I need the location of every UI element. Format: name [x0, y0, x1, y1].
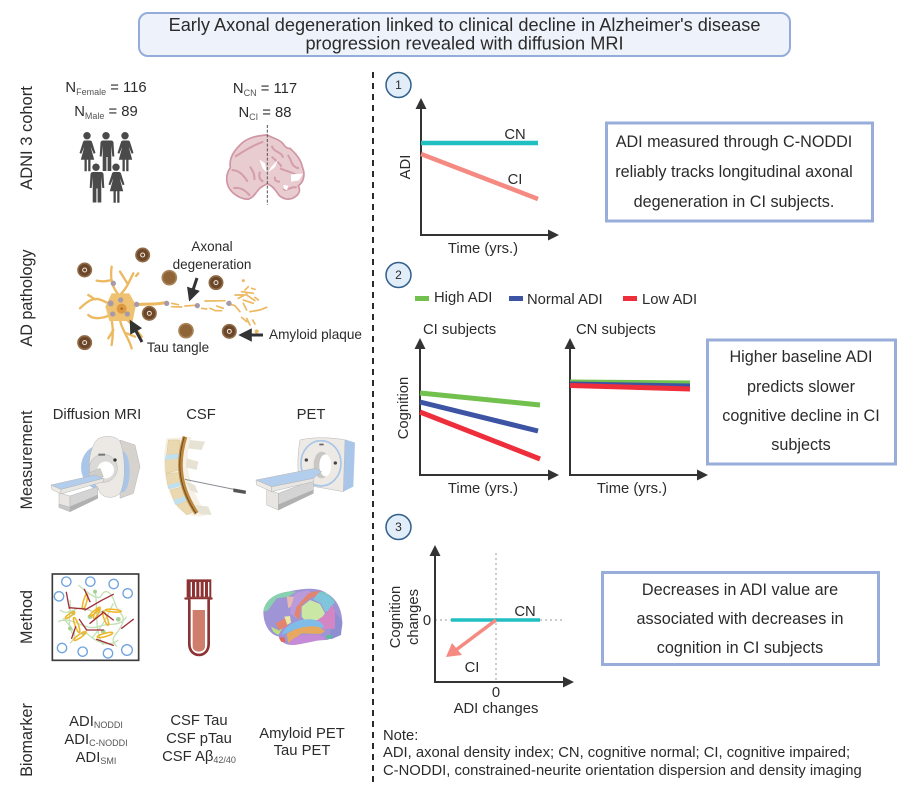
- chart 2a: CI subjects: Time (yrs.): [448, 481, 518, 497]
- chart 1: ADI over time: Time (yrs.): [448, 241, 518, 257]
- sex counts: N: [74, 104, 85, 120]
- chart 1: ADI over time: CI: [508, 172, 522, 188]
- row label: Method: Method: [18, 590, 36, 644]
- chart 1: ADI over time: [398, 98, 559, 257]
- callout 1: ADI measured through C-NODDI: [616, 133, 852, 151]
- arrow: amyloid plaque: [241, 334, 263, 336]
- icon: PET scanner: [256, 438, 355, 510]
- chart 2b: CN subjects: [564, 322, 708, 497]
- chart 3: ADI changes vs cognition changes: 0: [492, 685, 500, 701]
- water circles: [54, 577, 132, 658]
- neuron cell: [80, 267, 267, 348]
- diagnosis counts: N: [238, 105, 249, 121]
- biomarkers: CSF: CSF Tau: [170, 713, 228, 729]
- note: Note:: [383, 728, 418, 744]
- row label: ADNI 3 cohort: ADNI 3 cohort: [18, 86, 36, 190]
- badge 1: [386, 72, 411, 98]
- biomarkers: diffusion: NODDI: [94, 720, 123, 730]
- sex counts: Female: [76, 87, 106, 97]
- yellow neurites: [65, 594, 121, 642]
- AD pathology neuron diagram: [78, 248, 267, 349]
- chart 3: ADI changes vs cognition changes: [388, 545, 574, 717]
- icon: spine with lumbar puncture needle: [164, 437, 246, 516]
- callout 1: degeneration in CI subjects.: [634, 193, 834, 211]
- label: Amyloid plaque: Amyloid plaque: [269, 327, 362, 342]
- biomarkers: diffusion: [64, 714, 128, 766]
- diagnosis counts: [233, 81, 297, 122]
- heading: CSF: CSF: [186, 407, 216, 423]
- row label: AD pathology: AD pathology: [18, 249, 36, 347]
- heading: PET: PET: [297, 407, 325, 423]
- badge 3: 3: [395, 520, 402, 534]
- sex counts: [65, 80, 147, 121]
- icon: MRI scanner: [51, 436, 140, 512]
- title: Early Axonal degeneration linked to clinical decline in Alzheimer's disease: [169, 15, 760, 35]
- note: [383, 728, 862, 779]
- biomarkers: CSF: 42/40: [213, 755, 236, 765]
- label: Axonal degeneration: degeneration: [173, 257, 251, 272]
- icon: cortical parcellation brain: [263, 589, 342, 645]
- title: progression revealed with diffusion MRI: [305, 34, 624, 54]
- diagnosis counts: CN: [244, 88, 257, 98]
- callout 2: cognitive decline in CI: [722, 407, 880, 425]
- callout 2: Higher baseline ADI: [729, 348, 873, 366]
- callout 2: [708, 340, 896, 464]
- chart 2a: CI subjects: Cognition: [396, 377, 412, 439]
- chart 3: ADI changes vs cognition changes: CN: [514, 604, 536, 620]
- label: Tau tangle: Tau tangle: [147, 340, 209, 355]
- biomarkers: diffusion: SMI: [100, 756, 116, 766]
- chart 1: ADI over time: CN: [504, 127, 526, 143]
- arrow: tau tangle: [131, 322, 142, 342]
- chart 3: ADI changes vs cognition changes: ADI changes: [454, 701, 538, 717]
- legend: High ADI: [434, 290, 492, 306]
- amyloid plaques: [78, 248, 236, 349]
- callout 2: predicts slower: [747, 378, 856, 396]
- badge 3: [386, 514, 411, 540]
- title: [139, 13, 790, 56]
- diagnosis counts: = 117: [257, 81, 297, 97]
- sex counts: N: [65, 80, 76, 96]
- legend: [415, 290, 697, 308]
- callout 2: subjects: [771, 436, 831, 454]
- chart 2a: CI subjects: CI subjects: [423, 322, 496, 338]
- sex counts: = 116: [106, 80, 147, 96]
- legend: Low ADI: [642, 292, 697, 308]
- callout 3: cognition in CI subjects: [657, 639, 823, 657]
- badge 1: 1: [395, 78, 402, 92]
- note: ADI, axonal density index; CN, cognitive normal; CI, cognitive impaired;: [383, 745, 850, 761]
- neurite network: [58, 585, 127, 647]
- biomarkers: PET: [259, 726, 345, 759]
- row label: Biomarker: Biomarker: [18, 703, 36, 777]
- callout 3: [602, 572, 878, 664]
- chart 2b: CN subjects: Time (yrs.): [597, 481, 667, 497]
- chart 3: ADI changes vs cognition changes: 0: [423, 613, 431, 629]
- icon: people group: [80, 132, 134, 203]
- biomarkers: diffusion: ADI: [76, 750, 100, 766]
- red neurites: [66, 589, 133, 645]
- label: Axonal degeneration: [173, 239, 251, 272]
- sex counts: = 89: [104, 104, 138, 120]
- note: C-NODDI, constrained-neurite orientation dispersion and density imaging: [383, 763, 862, 779]
- chart 3: ADI changes vs cognition changes: CI: [465, 660, 479, 676]
- diagnosis counts: N: [233, 81, 244, 97]
- chart 2a: CI subjects: [396, 322, 559, 497]
- callout 3: associated with decreases in: [637, 610, 843, 628]
- diffusion model panel: [52, 574, 139, 660]
- chart 2b: CN subjects: CN subjects: [576, 322, 656, 338]
- callout 3: Decreases in ADI value are: [642, 581, 838, 599]
- arrow: axonal degeneration: [190, 278, 197, 299]
- biomarkers: CSF: [162, 713, 236, 765]
- biomarkers: PET: Amyloid PET: [259, 726, 345, 742]
- heading: Diffusion MRI: Diffusion MRI: [53, 407, 141, 423]
- chart 3: ADI changes vs cognition changes: Cognition: [388, 586, 404, 648]
- biomarkers: diffusion: ADI: [69, 714, 94, 730]
- icon: CSF sample tube: [184, 579, 213, 655]
- callout 1: reliably tracks longitudinal axonal: [615, 163, 853, 181]
- diagnosis counts: = 88: [258, 105, 292, 121]
- biomarkers: PET: Tau PET: [274, 743, 330, 759]
- icon: coronal brain section: [227, 125, 304, 205]
- biomarkers: diffusion: ADI: [64, 732, 89, 748]
- badge 2: 2: [395, 268, 402, 282]
- chart 3: ADI changes vs cognition changes: changes: [406, 589, 422, 645]
- callout 1: [606, 123, 872, 221]
- biomarkers: CSF: CSF Aβ: [162, 749, 213, 765]
- tau tangles: [108, 281, 232, 317]
- sex counts: Male: [85, 111, 104, 121]
- legend: Normal ADI: [527, 292, 603, 308]
- biomarkers: diffusion: C-NODDI: [89, 738, 128, 748]
- label: Axonal degeneration: Axonal: [191, 239, 233, 254]
- badge 2: [386, 262, 411, 288]
- diagnosis counts: CI: [249, 112, 258, 122]
- chart 1: ADI over time: ADI: [398, 155, 414, 179]
- biomarkers: CSF: CSF pTau: [166, 731, 232, 747]
- row label: Measurement: Measurement: [18, 410, 36, 509]
